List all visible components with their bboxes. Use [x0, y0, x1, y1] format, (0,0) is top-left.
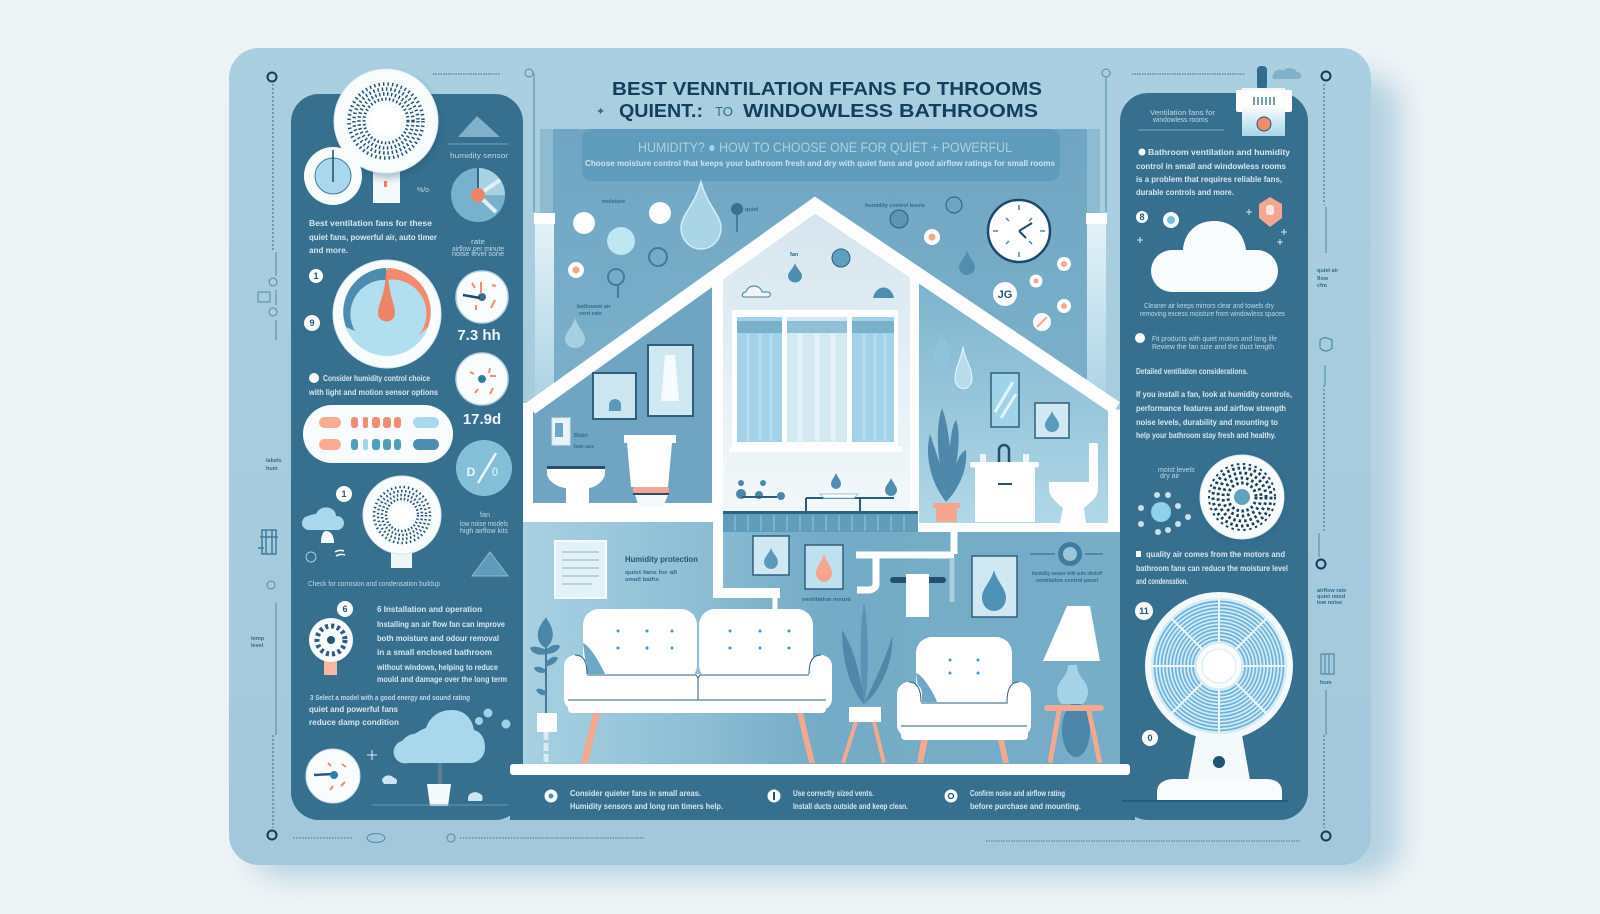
cloud caption: Fit products with quiet motors and long life [1152, 336, 1277, 343]
left room fixtures: Bidet [574, 433, 588, 439]
first text block [1136, 147, 1290, 197]
living room wall [523, 522, 1120, 767]
bottom band: Confirm noise and airflow rating [970, 788, 1065, 798]
title: WINDOWLESS BATHROOMS [743, 101, 1038, 121]
lower text [309, 695, 470, 727]
standing fan: 0 [1147, 733, 1153, 743]
big ceiling fan [334, 69, 440, 203]
left plant [530, 618, 560, 763]
intro text: Best ventilation fans for these [309, 218, 432, 228]
big drop [681, 182, 721, 249]
fan text [376, 604, 507, 684]
left panel contents: airflow per minute [452, 246, 504, 253]
second text block: noise levels, durability and mounting to [1136, 417, 1278, 427]
left panel contents: Check for corrosion and condensation buildup [308, 581, 440, 588]
side micro-labels: flow [1317, 276, 1329, 282]
pipes and wall art: ventilation mount [802, 597, 851, 603]
title: BEST VENNTILATION FFANS FO THROOMS [612, 79, 1042, 99]
cloud block icons: 8 [1139, 212, 1145, 222]
centre plant [842, 602, 892, 763]
side micro-labels: temp [251, 636, 265, 642]
centre room [723, 208, 910, 515]
pipes and wall art: quiet fans for all [625, 570, 678, 576]
title ornament: ✦ [596, 106, 605, 118]
fan text: without windows, helping to reduce [376, 662, 498, 672]
header banner: HUMIDITY? ● HOW TO CHOOSE ONE FOR QUIET + POWERFUL [638, 139, 1012, 155]
cloud block icons [1136, 197, 1287, 292]
dot grille fan [1200, 455, 1285, 541]
left panel contents [302, 69, 512, 806]
water sun icon: fan [1165, 462, 1174, 468]
cloud caption [1135, 303, 1285, 351]
bottom connectors [293, 74, 1300, 842]
right header [1138, 110, 1224, 130]
percent circle: D [467, 465, 476, 479]
header banner: Choose moisture control that keeps your bathroom fresh and dry with quiet fans and good airflow ratings for small rooms [585, 159, 1056, 168]
plant [928, 408, 966, 502]
side micro-labels: quiet rated [1317, 594, 1345, 600]
wall labels [577, 199, 925, 317]
left panel contents: fan [480, 512, 490, 519]
gauge caption: with light and motion sensor options [308, 387, 438, 397]
left panel [291, 94, 523, 820]
toilet [1089, 443, 1098, 487]
header banner [582, 129, 1060, 181]
side micro-labels: level [251, 643, 264, 649]
left panel contents: low noise models [460, 521, 508, 528]
second text block: help your bathroom stay fresh and healthy. [1136, 430, 1276, 440]
pipes and wall art: small baths [625, 577, 659, 583]
pie [451, 168, 505, 222]
side micro-labels: quiet air [1317, 268, 1339, 274]
side micro-labels: airflow rate [1317, 588, 1346, 594]
water sun icon: dry air [1160, 473, 1180, 480]
percent circle: 0 [492, 465, 499, 479]
vanity [975, 467, 1035, 522]
bottom band [510, 775, 1135, 820]
right panel [1120, 93, 1308, 820]
fan text: mould and damage over the long term [377, 674, 507, 684]
wall labels: humidity control levels [865, 203, 925, 209]
first text block: is a problem that requires reliable fans, [1136, 174, 1282, 184]
percent circle [456, 440, 512, 496]
standing fan [1122, 592, 1293, 801]
bottom band: Humidity sensors and long run timers help. [570, 801, 723, 811]
top ring connectors [525, 69, 1110, 212]
sofa [564, 609, 832, 763]
mini gauges: 17.9d [463, 411, 501, 428]
fan text: 6 Installation and operation [377, 604, 482, 614]
bidet [547, 467, 605, 503]
left room [533, 280, 712, 503]
wall labels: bathroom air [577, 304, 611, 310]
gauge caption: Consider humidity control choice [323, 373, 430, 383]
small drops [565, 250, 975, 389]
pipes and wall art: humidity sensor with auto shutoff [1032, 571, 1102, 577]
frames [593, 373, 636, 419]
number badges: 1 [313, 271, 319, 281]
small cloud [302, 507, 345, 562]
title [612, 79, 1042, 121]
lower text: quiet and powerful fans [309, 704, 398, 714]
mounted vent [1236, 66, 1302, 136]
small fan: 6 [342, 604, 348, 614]
bottom band: before purchase and mounting. [970, 801, 1081, 811]
frame decorations: timelines and rings [258, 69, 1334, 842]
number badges [304, 269, 323, 331]
first text block: Bathroom ventilation and humidity [1148, 147, 1290, 157]
fan text: in a small enclosed bathroom [377, 647, 492, 657]
lower text: 3 Select a model with a good energy and sound rating [310, 695, 470, 702]
bottom band: Consider quieter fans in small areas. [570, 788, 701, 798]
water sun icon: moist levels [1158, 467, 1195, 474]
bottom band: Use correctly sized vents. [793, 788, 874, 798]
side micro-labels: hum [266, 466, 278, 472]
card shadow [250, 75, 1400, 877]
right room fixtures [928, 373, 1098, 523]
pipes and wall art [555, 532, 1103, 617]
hill icon [448, 116, 508, 144]
left panel contents: rate [471, 239, 485, 246]
number badges: 9 [309, 318, 315, 328]
gauge caption [308, 373, 438, 397]
second text block [1136, 366, 1292, 440]
left room fixtures [547, 345, 693, 507]
cloud caption: removing excess moisture from windowless spaces [1140, 311, 1285, 318]
toilet [624, 435, 676, 443]
wall labels: quiet [745, 207, 758, 213]
second text block: performance features and airflow strength [1136, 403, 1286, 413]
side micro-labels: low noise [1317, 600, 1342, 606]
columns [534, 213, 1107, 408]
left timeline [258, 72, 278, 840]
first text block: durable controls and more. [1136, 187, 1234, 197]
intro text [309, 218, 438, 255]
intro text: quiet fans, powerful air, auto timer [309, 232, 438, 242]
first text block: control in small and windowless rooms [1136, 161, 1286, 171]
second text block: If you install a fan, look at humidity controls, [1136, 389, 1292, 399]
pipes and wall art: ventilation control panel [1036, 578, 1098, 584]
right timeline [1316, 72, 1334, 840]
side micro-labels [251, 268, 1346, 686]
wall [540, 129, 1100, 529]
left panel contents: %/o [417, 187, 429, 194]
small fan [309, 601, 353, 675]
intro text: and more. [309, 245, 348, 255]
wall icons [565, 182, 1071, 389]
left panel contents: humidity sensor [450, 153, 509, 160]
third text block: and condensation. [1136, 576, 1188, 586]
fan text: both moisture and odour removal [377, 633, 499, 643]
floating circles: JG [998, 289, 1012, 301]
third text block: quality air comes from the motors and [1146, 549, 1285, 559]
second fan: 1 [341, 489, 347, 499]
second text block: Detailed ventilation considerations. [1136, 366, 1248, 376]
lamp and side table [1043, 606, 1104, 763]
control pill [303, 405, 453, 463]
side micro-labels: cfm [1317, 283, 1327, 289]
structure walls and floors [523, 270, 1120, 598]
side micro-labels: labels [266, 458, 282, 464]
floor [510, 764, 1130, 775]
title: TO [715, 104, 733, 119]
mini gauges [456, 271, 508, 428]
cloud tree [367, 708, 510, 806]
pipes and wall art: Humidity protection [625, 555, 698, 564]
radiator [723, 511, 918, 532]
side micro-labels: hum [1320, 680, 1332, 686]
title: QUIENT.: [619, 101, 703, 121]
standing fan: 11 [1139, 606, 1149, 616]
dial [304, 147, 362, 205]
clock [988, 200, 1050, 262]
centre scene [510, 129, 1135, 820]
left panel contents: high airflow kits [460, 528, 508, 535]
water sun icon [1138, 462, 1195, 535]
roof [531, 205, 1116, 408]
centre shelf [723, 473, 918, 532]
floating circles [568, 197, 1071, 331]
wall labels: fan [790, 252, 799, 258]
fan text: Installing an air flow fan can improve [377, 619, 505, 629]
right room [919, 280, 1108, 523]
right header: windowless rooms [1152, 117, 1208, 124]
right header: Ventilation fans for [1150, 110, 1216, 117]
armchair [897, 637, 1031, 763]
right panel contents [1122, 66, 1302, 801]
house mini icon [472, 552, 508, 576]
third text block [1136, 549, 1288, 586]
cloud caption: Review the fan size and the duct length [1152, 344, 1274, 351]
lower text: reduce damp condition [309, 717, 399, 727]
bottom band: Install ducts outside and keep clean. [793, 801, 908, 811]
cloud caption: Cleaner air keeps mirrors clear and towels dry [1144, 303, 1274, 310]
third text block: bathroom fans can reduce the moisture level [1136, 563, 1288, 573]
main card [229, 48, 1371, 865]
window [729, 310, 902, 452]
mini gauges: 7.3 hh [457, 327, 501, 344]
second fan [336, 476, 441, 568]
left room fixtures: low use [574, 444, 594, 450]
wall labels: moisture [602, 199, 625, 205]
wall labels: vent rate [579, 311, 602, 317]
left panel contents: noise level sone [452, 251, 504, 258]
humidity gauge [333, 260, 441, 368]
corner gauge [306, 749, 360, 803]
